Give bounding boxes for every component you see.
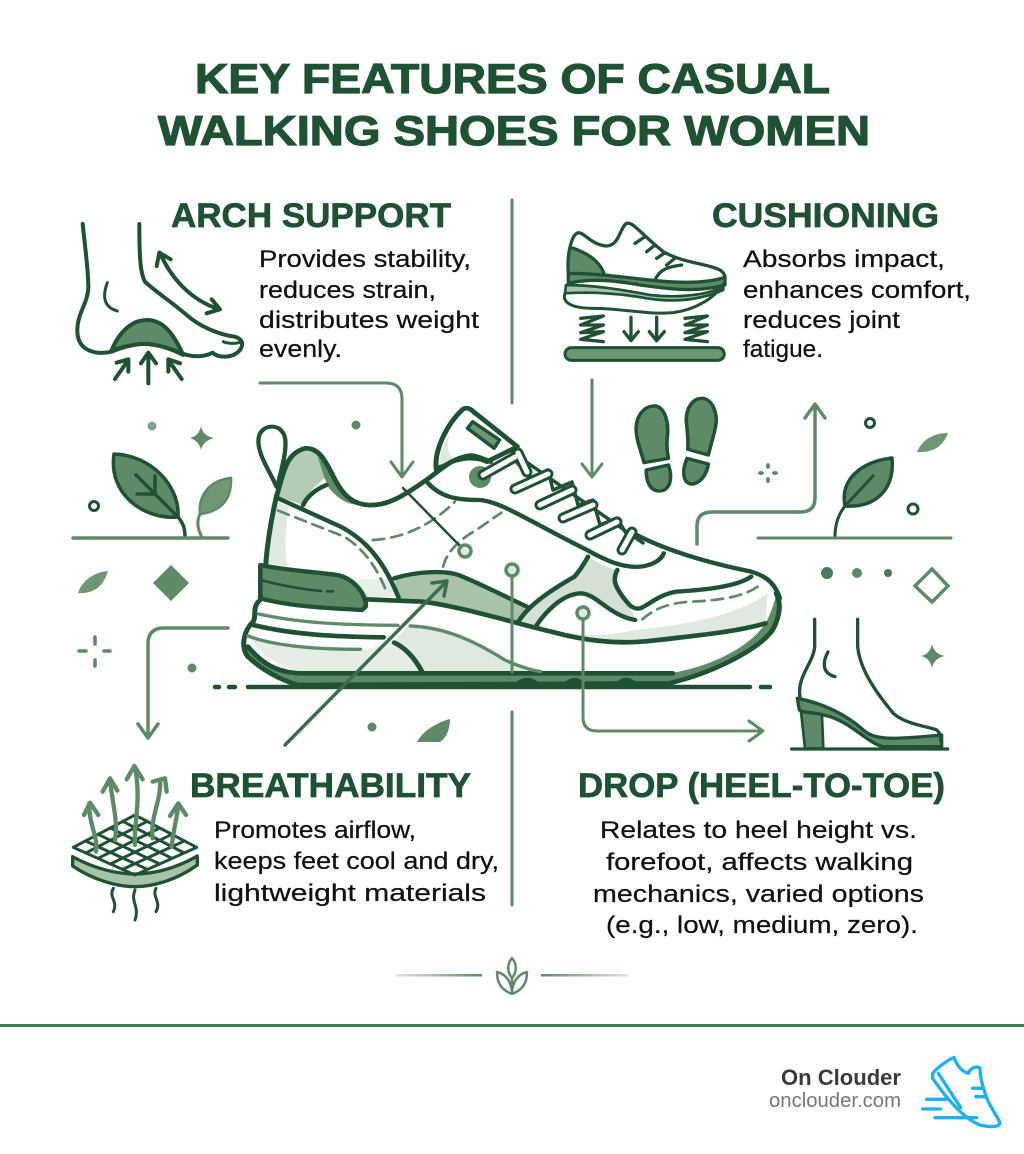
heel loop [258,427,285,487]
midsole panel [394,625,541,672]
title: WALKING SHOES FOR WOMEN [158,107,870,154]
ground line [215,685,770,689]
tongue [436,408,517,470]
text: breathability description: keeps feet cool and dry, [214,848,499,875]
midsole outlines [244,593,779,685]
heel tab edge [316,448,360,505]
text: cushioning description: fatigue. [743,336,823,363]
midsole stripes [248,614,541,672]
icon: footprints [636,398,716,491]
text: cushioning description: Absorbs impact, [743,246,945,273]
text: drop description: Relates to heel height vs. [600,817,917,844]
eyelet [469,466,491,488]
divider ornament [396,958,628,994]
stitching [278,502,762,619]
footer brand text [769,1065,901,1112]
text: cushioning description: reduces joint [743,307,900,334]
pointer: upper leader [403,488,471,557]
arrow: arch support to shoe [260,383,413,477]
text: breathability description: lightweight materials [214,880,486,907]
arrow: breathability to shoe [285,581,447,745]
tongue label [467,422,500,448]
upper outlines [278,483,780,627]
text: drop description: mechanics, varied options [593,881,924,908]
pointer: midfoot leader [506,564,518,672]
heel quarter lower shade [355,579,398,597]
panel: cushioning [564,197,971,363]
text: drop description: (e.g., low, medium, zero). [606,912,918,939]
icon: leaf sprout left [73,454,231,538]
forefoot midsole shade [537,593,767,645]
laces [483,452,643,550]
panel: drop [578,767,945,939]
outsole lugs [519,679,633,682]
text: arch support description: Provides stability, [259,246,471,273]
text: arch support description [259,246,479,363]
illustration: walking shoe [244,408,780,685]
footer brand text: On Clouder [781,1065,901,1090]
text: breathability description [214,817,499,907]
title [158,55,870,154]
center divider bottom [510,712,514,905]
icon: decorative dots and diamond right [821,567,948,668]
light swoosh panel [517,557,637,627]
text: arch support description: reduces strain, [259,277,436,304]
heel counter stripe [260,580,333,591]
heel counter [260,565,366,610]
text: cushioning description: enhances comfort, [743,277,971,304]
center divider top [510,200,514,403]
shoe artwork [244,408,780,685]
shoe body fill [246,450,777,683]
heel tab [278,449,332,505]
icon: cushioned shoe with springs [564,223,725,360]
title: KEY FEATURES OF CASUAL [195,55,830,102]
icon: leaf sprout right [758,418,951,538]
text: cushioning description [743,246,971,363]
heading: drop: DROP (HEEL-TO-TOE) [578,767,945,805]
panel: breathability [73,766,499,920]
icon: brand running shoe [923,1057,1000,1127]
arrow: cushioning to shoe [582,380,602,477]
tongue shade [440,435,453,465]
heading: cushioning: CUSHIONING [712,197,939,235]
arrow: forefoot to drop [577,607,763,741]
heel quarter shade [266,502,289,567]
green side panel [394,572,527,623]
icon: heeled foot [792,619,948,749]
heading: arch support: ARCH SUPPORT [171,197,451,235]
heading: breathability: BREATHABILITY [190,767,471,805]
panel: arch support [77,197,479,383]
text: arch support description: distributes weight [259,307,479,334]
arrow: up to cushioning [697,404,825,544]
text: breathability description: Promotes airflow, [214,817,416,844]
text: arch support description: evenly. [259,336,342,363]
footer brand text: onclouder.com [769,1090,901,1112]
icon: breathable mesh with airflow [73,766,197,920]
collar outline [266,448,491,565]
icon: decorative shapes left [78,420,450,742]
text: drop description: forefoot, affects walking [606,849,913,876]
outsole [244,593,780,685]
footer rule [0,1024,1024,1027]
text: drop description [593,817,924,939]
arrow: to breathability [138,628,228,738]
icon: small sparkle right [758,463,778,483]
icon: foot with arch [77,224,242,383]
midsole heel panel [250,637,419,672]
